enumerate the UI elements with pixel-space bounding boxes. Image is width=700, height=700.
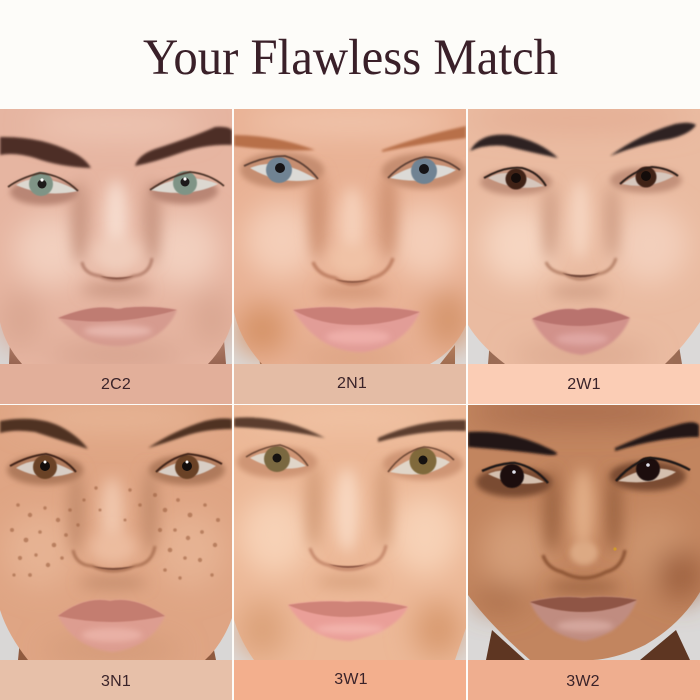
lips — [293, 307, 420, 352]
swatch: 2C2 — [0, 364, 232, 404]
swatch: 3N1 — [0, 660, 232, 700]
nose — [73, 546, 155, 571]
panel: 3W2 portrait — [468, 400, 700, 660]
swatch: 3W1: 3W1 — [334, 671, 368, 688]
panel: 3W1 portrait — [234, 405, 466, 660]
nose — [313, 258, 393, 284]
nose — [82, 258, 152, 280]
panel: 3N1 portrait — [0, 405, 232, 660]
lips — [530, 597, 637, 641]
eyebrows — [234, 126, 466, 152]
eyebrows — [0, 418, 232, 449]
swatch: 2N1 — [234, 364, 466, 404]
swatch: 3W2 — [468, 660, 700, 700]
panel: 2N1 portrait — [234, 109, 470, 366]
swatch: 2W1 — [468, 364, 700, 404]
eyebrows — [468, 422, 699, 455]
eyes — [240, 152, 466, 189]
title: Your Flawless Match — [143, 30, 558, 86]
eyes — [237, 445, 463, 480]
swatch: 2N1: 2N1 — [337, 375, 367, 392]
eyes — [476, 457, 690, 497]
panel: 2W1 portrait — [468, 106, 700, 364]
eyebrows — [234, 417, 466, 442]
swatch: 3W2: 3W2 — [566, 673, 600, 690]
swatch: 2W1: 2W1 — [567, 376, 601, 393]
nose — [543, 541, 625, 578]
swatch: 3N1: 3N1 — [101, 673, 131, 690]
nose — [546, 258, 616, 279]
nose — [310, 545, 386, 570]
freckles — [10, 486, 220, 580]
swatch: 2C2: 2C2 — [101, 376, 131, 393]
eyebrows — [470, 123, 696, 158]
eyes — [8, 171, 224, 205]
panel: 2C2 portrait — [0, 109, 232, 364]
swatch: 3W1 — [234, 660, 466, 700]
lips — [532, 308, 630, 355]
eyebrows — [0, 127, 232, 168]
eyes — [480, 166, 682, 195]
lips — [58, 307, 177, 346]
lips — [58, 600, 165, 652]
lips — [288, 601, 408, 641]
eyes — [7, 454, 225, 485]
